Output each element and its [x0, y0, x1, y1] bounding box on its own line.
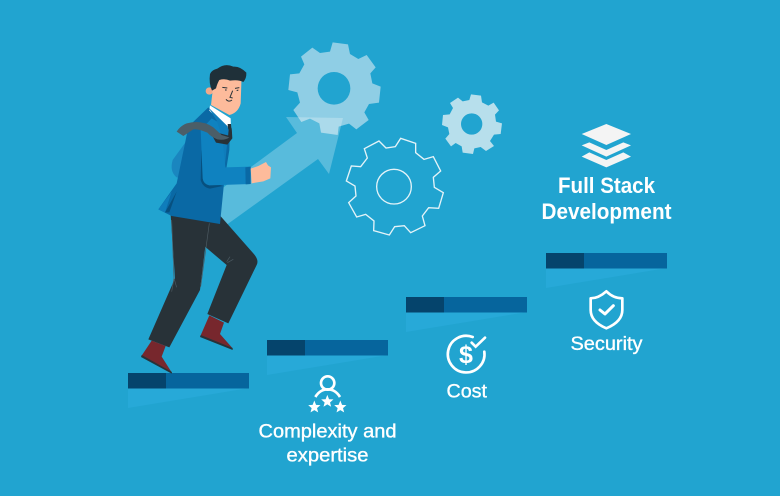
heading: full stack development: Full Stack	[558, 173, 656, 198]
step 4	[546, 253, 667, 288]
legs and shoes	[141, 214, 257, 374]
small filled gear	[442, 94, 502, 154]
label: complexity and expertise: Complexity and	[258, 422, 396, 442]
label: complexity and expertise: expertise	[286, 446, 368, 466]
label: complexity and expertise	[258, 422, 396, 466]
step 2	[267, 340, 388, 375]
label: cost: Cost	[446, 382, 488, 402]
icon: shield with check	[591, 291, 622, 328]
step 3	[406, 297, 527, 332]
outline gear	[346, 138, 443, 235]
step 1	[128, 373, 249, 408]
icon: dollar with check: $	[459, 341, 473, 369]
label: security: Security	[570, 334, 643, 355]
icon: layered stack	[582, 124, 631, 167]
icon: dollar with check	[448, 336, 485, 372]
heading: full stack development: Development	[542, 199, 672, 224]
icon: person with stars	[308, 376, 346, 412]
large filled gear	[288, 42, 381, 135]
heading: full stack development	[542, 173, 672, 224]
torso, arm and head	[158, 65, 271, 224]
businessman climbing	[141, 65, 271, 374]
growth arrow	[205, 117, 343, 231]
